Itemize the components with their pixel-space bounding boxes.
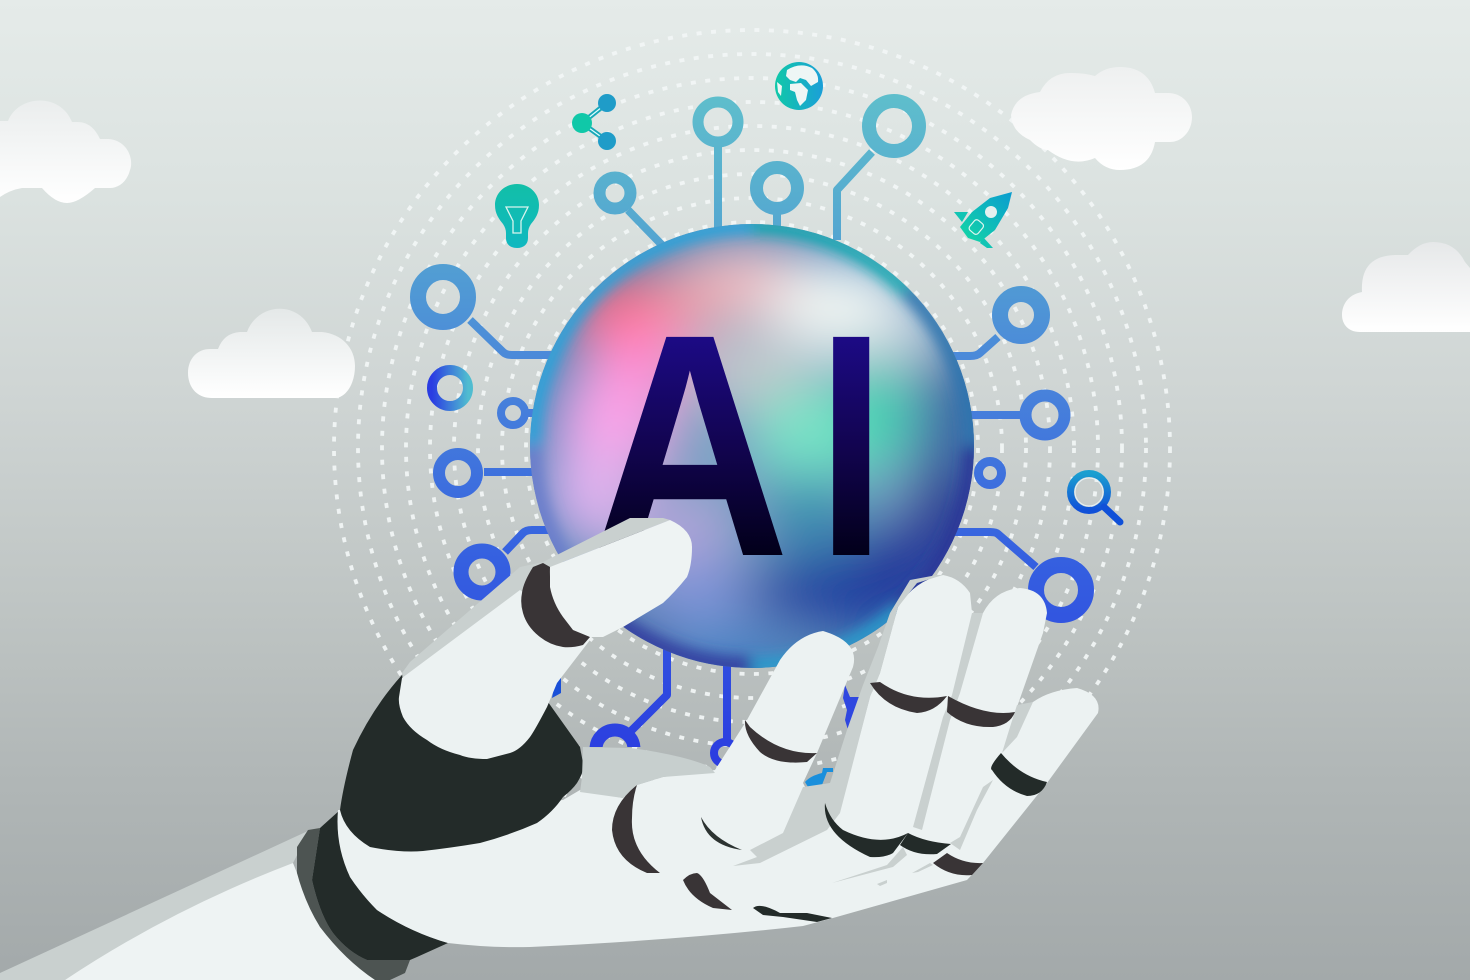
node rings: [698, 102, 738, 142]
cloud: top left: [0, 100, 131, 203]
palm shadow under thumb: [580, 747, 715, 798]
sphere: [530, 224, 980, 670]
title text: AI: A: [590, 269, 790, 623]
icon: rocket: [954, 192, 1012, 248]
title text: AI: [590, 268, 886, 623]
title text: AI: I: [816, 268, 886, 623]
cloud: right: [1342, 242, 1470, 332]
palm and fingers: [338, 575, 1099, 947]
thumb tip: [550, 520, 692, 637]
sphere rim shading: [532, 226, 972, 666]
thumb joint: [521, 563, 590, 647]
cloud: left middle: [188, 309, 355, 398]
finger joints: [745, 720, 817, 763]
cloud: top right: [1011, 67, 1192, 170]
icon: light bulb: [495, 184, 539, 248]
robot arm: [0, 810, 448, 980]
circuit network: [418, 101, 1086, 768]
finger shading: [733, 575, 943, 866]
thumb shading: [402, 518, 670, 683]
concentric dotted rings: [334, 30, 1170, 866]
thumb base: [399, 590, 590, 759]
icon: globe: [775, 62, 823, 110]
robot hand: [338, 518, 1099, 947]
connector lines: [470, 146, 1036, 740]
icon: magnifier: [1070, 474, 1120, 522]
wrist cuff: [297, 828, 410, 980]
palm seams: [612, 785, 660, 873]
ring fragments behind the hand: [552, 678, 561, 698]
black wrist joint: [340, 600, 583, 852]
music note icon peek: [805, 768, 833, 788]
icon: share network: [572, 94, 616, 150]
